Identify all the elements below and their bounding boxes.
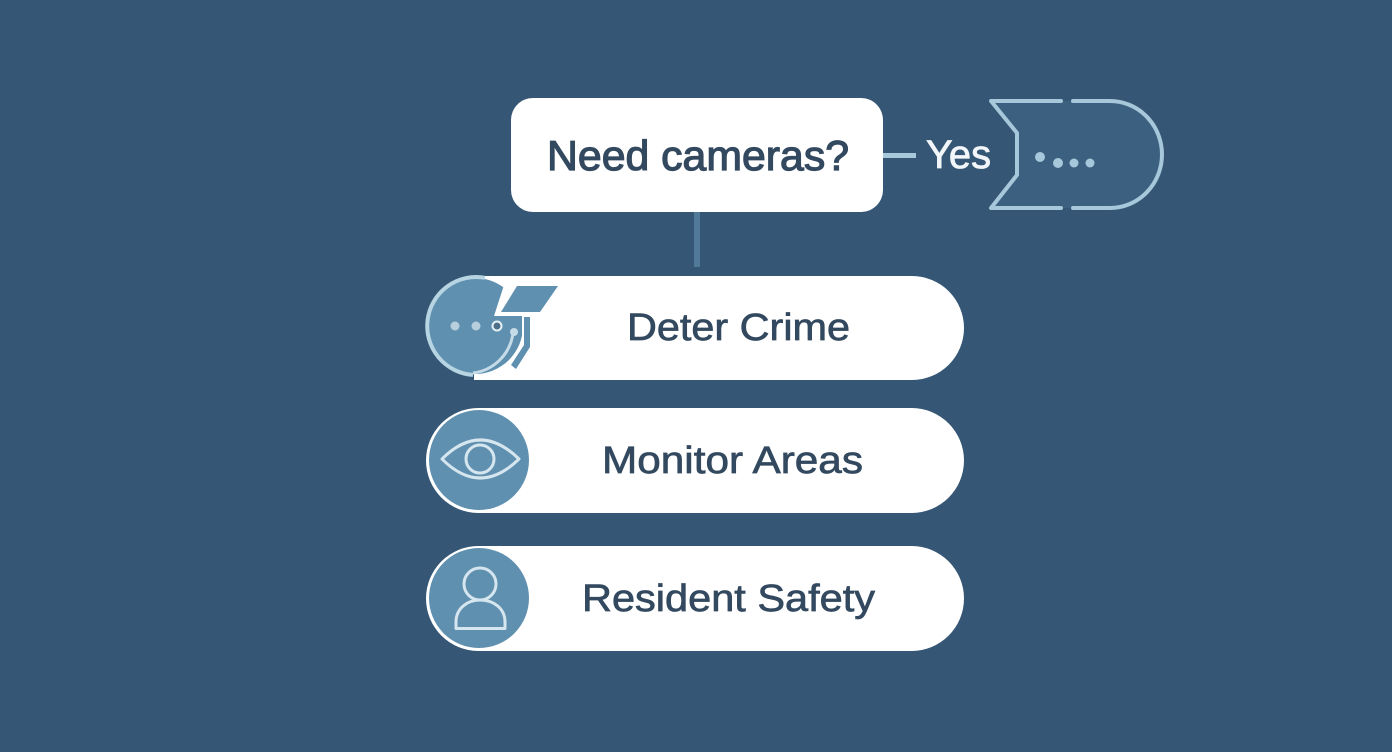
label: Yes: Yes	[926, 133, 991, 177]
icon: camera with dots	[427, 277, 564, 375]
icon: person	[429, 548, 529, 648]
connector: question to Yes	[883, 153, 916, 158]
icon: eye	[429, 410, 529, 510]
option: Deter Crime: Deter Crime	[627, 307, 850, 349]
outcome shape: Yes result	[991, 101, 1162, 208]
option: Resident Safety: Resident Safety	[582, 578, 875, 620]
option: Deter Crime	[427, 276, 964, 380]
connector: question to options	[694, 212, 700, 267]
option: Monitor Areas: Monitor Areas	[602, 440, 863, 482]
option: Resident Safety	[426, 546, 964, 651]
option: Monitor Areas	[426, 408, 964, 513]
decision box: Need cameras?: Need cameras?	[547, 132, 849, 179]
decision box: Need cameras?	[511, 98, 883, 212]
